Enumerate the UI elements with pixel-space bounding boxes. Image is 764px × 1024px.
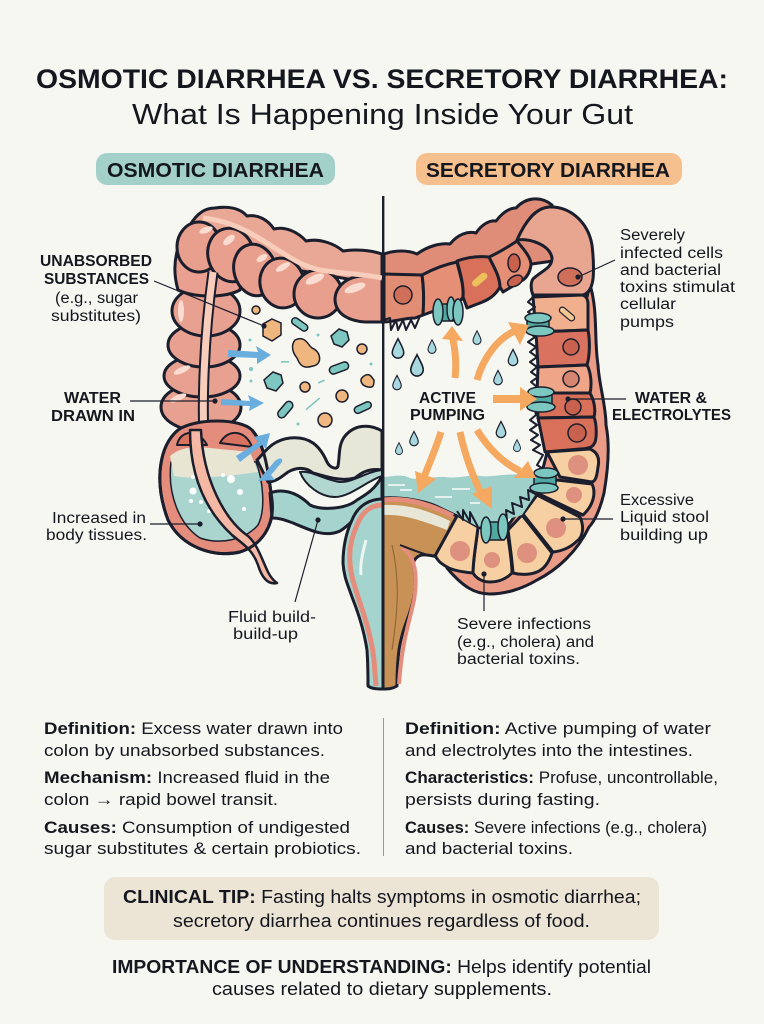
diagram: right colon, secretory [384, 199, 608, 594]
label: severely infected cells: toxins stimulat [620, 279, 736, 296]
text block: osmotic details: Mechanism: Increased fluid in the [44, 768, 330, 787]
corner [517, 207, 594, 295]
leader lines [130, 260, 626, 611]
top cells [384, 274, 424, 322]
label: severely infected cells: cellular [620, 296, 676, 313]
rectum right half [383, 498, 457, 689]
arrows: active pumping [415, 322, 537, 509]
label: severe infections: Severe infections [457, 616, 591, 633]
text block: osmotic details: colon by unabsorbed substances. [44, 741, 325, 760]
label: fluid build-up [228, 609, 316, 643]
label: fluid build-up: build-up [233, 626, 298, 643]
ascending corner [175, 222, 245, 296]
band and tail [190, 430, 277, 583]
tan cells [547, 449, 599, 482]
back haustra row [190, 207, 382, 285]
label: unabsorbed substances: (e.g., sugar [55, 290, 138, 307]
label: water and electrolytes: ELECTROLYTES [612, 407, 731, 424]
title [36, 64, 728, 131]
text block: osmotic details: colon → rapid bowel transit. [44, 790, 278, 809]
label: severe infections: (e.g., cholera) and [457, 634, 594, 651]
title: OSMOTIC DIARRHEA VS. SECRETORY DIARRHEA: [36, 64, 728, 94]
label: severely infected cells: and bacterial [620, 262, 721, 279]
label: unabsorbed substances: UNABSORBED [40, 253, 152, 270]
nuclei [394, 254, 586, 442]
text block: osmotic details: sugar substitutes & certain probiotics. [44, 839, 361, 858]
footer: importance of understanding: causes related to dietary supplements. [212, 979, 552, 999]
bacterium [471, 271, 489, 288]
label: severely infected cells: pumps [620, 314, 674, 331]
white curl [257, 426, 382, 482]
heading: secretory diarrhea [416, 153, 682, 185]
text block: secretory details: Causes: Severe infections (e.g., cholera) [405, 819, 707, 837]
right outer wall [440, 285, 608, 594]
callout: clinical tip [104, 877, 659, 940]
colon fluid and rectum [343, 297, 545, 689]
label: fluid build-up: Fluid build- [228, 609, 316, 626]
label: severe infections [457, 616, 594, 668]
cecum pouch [160, 421, 272, 554]
label: excessive liquid stool: Liquid stool [620, 509, 709, 526]
haustra highlights [169, 225, 367, 405]
heading: osmotic diarrhea: OSMOTIC DIARRHEA [107, 160, 324, 182]
cecum outline wall [160, 430, 272, 554]
label: increased in body tissues [46, 510, 147, 544]
arrows: water drawn in [221, 346, 282, 481]
back row [384, 199, 560, 285]
rectum left half [343, 499, 383, 689]
footer: importance of understanding [112, 957, 651, 999]
label: severely infected cells [620, 227, 736, 331]
text block: secretory details: Definition: Active pumping of water [405, 719, 711, 738]
heading: osmotic diarrhea [96, 153, 335, 185]
text block: secretory details [405, 719, 718, 858]
text block: secretory details: and electrolytes into the intestines. [405, 741, 693, 760]
label: excessive liquid stool: building up [620, 527, 708, 544]
taenia band [203, 218, 382, 278]
label: active pumping [410, 390, 485, 424]
label: active pumping: PUMPING [410, 407, 485, 424]
label: unabsorbed substances [40, 253, 152, 325]
droplets [392, 331, 520, 455]
callout: clinical tip: secretory diarrhea continues regardless of food. [173, 911, 590, 931]
text block: secretory details: and bacterial toxins. [405, 839, 573, 858]
footer: importance of understanding: IMPORTANCE OF UNDERSTANDING: Helps identify potential [112, 957, 651, 977]
heading: secretory diarrhea: SECRETORY DIARRHEA [426, 160, 670, 182]
title: What Is Happening Inside Your Gut [132, 99, 633, 131]
label: severe infections: bacterial toxins. [457, 651, 580, 668]
label: unabsorbed substances: substitutes) [51, 308, 141, 325]
cecum bubbles [189, 473, 246, 513]
callout: clinical tip: CLINICAL TIP: Fasting halts symptoms in osmotic diarrhea; [123, 887, 641, 907]
label: severely infected cells: Severely [620, 227, 685, 244]
label: water and electrolytes [612, 390, 731, 424]
text block: secretory details: Characteristics: Profuse, uncontrollable, [405, 769, 718, 787]
label: water and electrolytes: WATER & [635, 390, 707, 407]
text block: osmotic details [44, 719, 361, 858]
label: active pumping: ACTIVE [419, 390, 476, 407]
divider between columns [383, 718, 384, 856]
particles: unabsorbed substances [248, 306, 374, 427]
text block: osmotic details: Definition: Excess water drawn into [44, 719, 343, 738]
text block: secretory details: persists during fasting. [405, 790, 600, 809]
label: increased in body tissues: body tissues. [46, 527, 147, 544]
label: severely infected cells: infected cells [620, 245, 723, 262]
membrane pumps [433, 297, 558, 543]
label: excessive liquid stool [620, 492, 709, 544]
teal tube [270, 476, 382, 534]
diagram: left colon, osmotic [160, 207, 382, 583]
villi [384, 297, 545, 470]
label: water drawn in [51, 390, 135, 425]
left column [161, 286, 241, 431]
label: excessive liquid stool: Excessive [620, 492, 694, 509]
right column cells [533, 295, 588, 332]
label: unabsorbed substances: SUBSTANCES [44, 271, 149, 288]
label: water drawn in: WATER [64, 390, 121, 407]
center divider [382, 196, 384, 690]
text block: osmotic details: Causes: Consumption of undigested [44, 818, 350, 837]
label: water drawn in: DRAWN IN [51, 408, 135, 425]
label: increased in body tissues: Increased in [52, 510, 146, 527]
transverse colon front haustra [177, 222, 382, 322]
